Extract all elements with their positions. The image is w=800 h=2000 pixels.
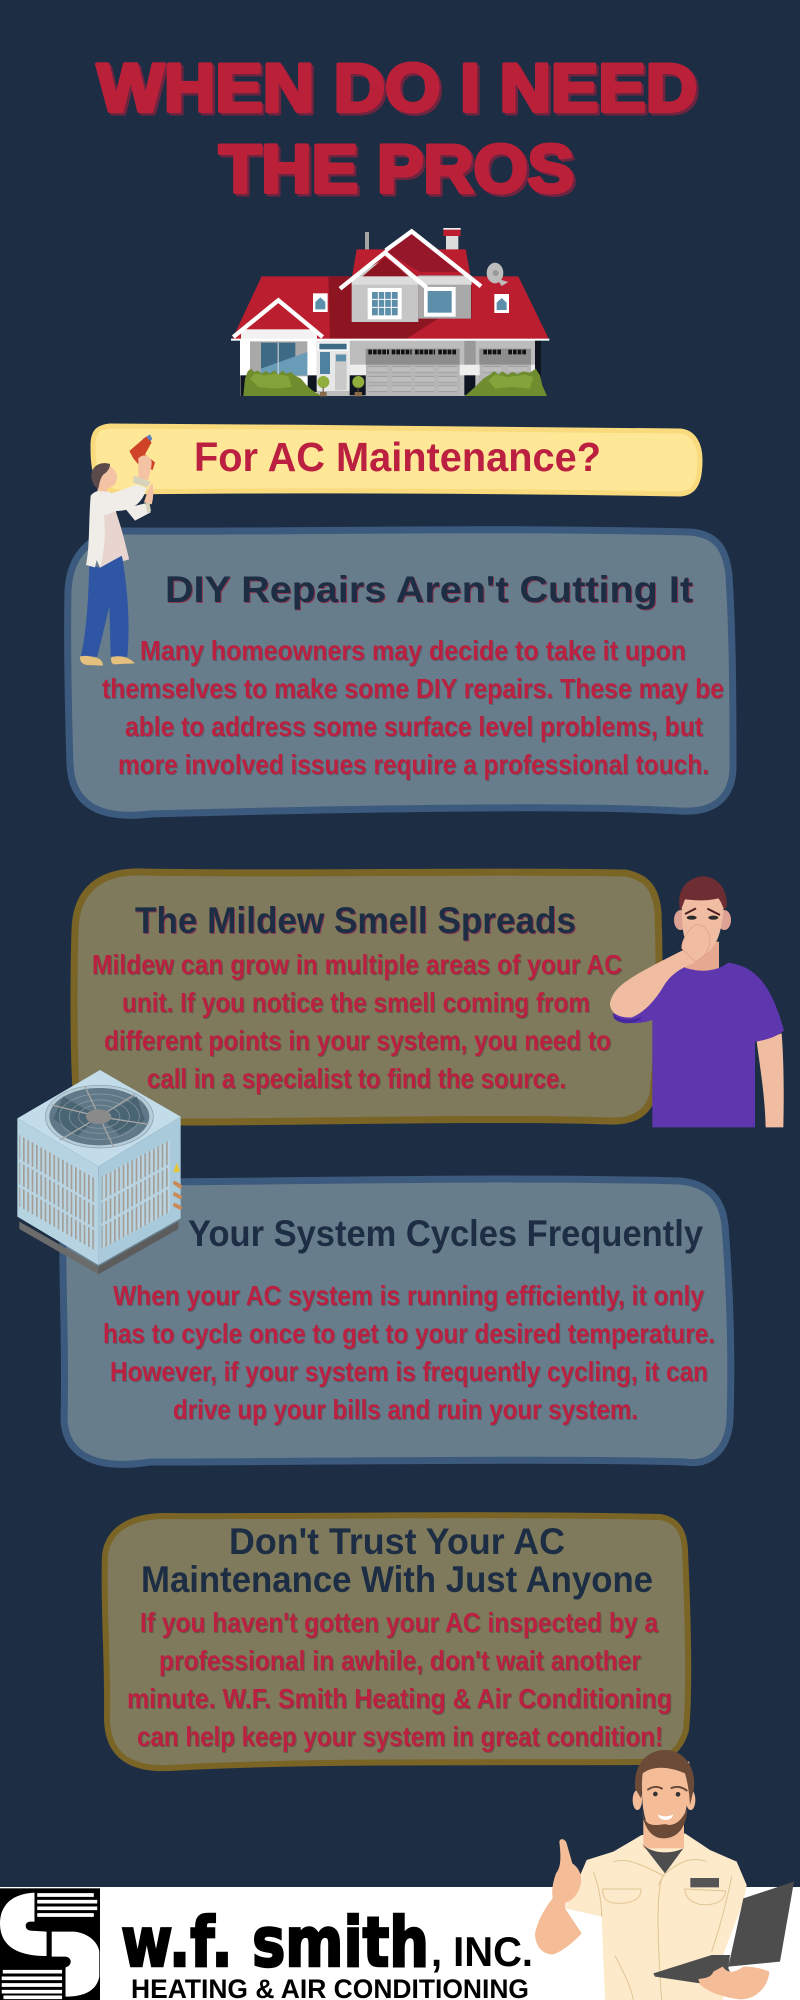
body text: system cycles: However, if your system is frequently cycling, it can <box>110 1356 708 1387</box>
body text: DIY repairs <box>102 635 724 780</box>
illustration: AC unit <box>17 1070 181 1274</box>
body text: system cycles: has to cycle once to get to your desired temperature. <box>103 1318 715 1349</box>
title: THE PROS <box>219 131 574 207</box>
body text: DIY repairs: Many homeowners may decide to take it upon <box>140 635 686 666</box>
body text: system cycles: drive up your bills and ruin your system. <box>173 1394 638 1425</box>
body text: trust your AC: professional in awhile, don't wait another <box>159 1645 641 1676</box>
illustration: technician with laptop <box>535 1750 794 2000</box>
body text: DIY repairs: able to address some surface level problems, but <box>125 711 703 742</box>
body text: mildew smell: Mildew can grow in multiple areas of your AC <box>92 949 622 980</box>
body text: system cycles: When your AC system is running efficiently, it only <box>113 1280 704 1311</box>
illustration: house <box>231 228 549 396</box>
title <box>97 50 700 210</box>
illustration: man with drill <box>80 434 155 666</box>
heading: system cycles: Your System Cycles Frequently <box>188 1213 703 1254</box>
title: WHEN DO I NEED <box>97 50 697 126</box>
panel: system cycles <box>63 1179 731 1464</box>
logo mark <box>0 1888 100 2000</box>
title: THE PROS <box>222 134 576 210</box>
body text: mildew smell: call in a specialist to find the source. <box>147 1063 566 1094</box>
banner: For AC Maintenance?: For AC Maintenance? <box>194 434 601 480</box>
title: WHEN DO I NEED <box>100 52 700 128</box>
heading: trust your AC: Maintenance With Just Anyone <box>141 1559 653 1600</box>
body text: mildew smell: unit. If you notice the smell coming from <box>122 987 590 1018</box>
panel: DIY repairs <box>68 530 733 815</box>
body text: trust your AC <box>127 1607 672 1752</box>
body text: DIY repairs: themselves to make some DIY repairs. These may be <box>102 673 724 704</box>
illustration: person covering nose <box>610 876 784 1127</box>
body text: mildew smell <box>92 949 622 1094</box>
heading: mildew smell: The Mildew Smell Spreads <box>135 900 576 941</box>
footer band <box>0 1887 800 2000</box>
body text: trust your AC: can help keep your system in great condition! <box>137 1721 663 1752</box>
heading: DIY repairs: DIY Repairs Aren't Cutting It <box>165 569 693 610</box>
banner: For AC Maintenance? <box>93 426 700 494</box>
heading: trust your AC <box>141 1521 653 1600</box>
logo wordmark: w.f. smith <box>121 1903 429 1983</box>
body text: system cycles <box>103 1280 715 1425</box>
panel: trust your AC <box>105 1515 688 1768</box>
body text: mildew smell: different points in your system, you need to <box>104 1025 611 1056</box>
logo wordmark: , INC. <box>431 1928 533 1975</box>
heading: trust your AC: Don't Trust Your AC <box>229 1521 565 1562</box>
body text: DIY repairs: more involved issues require a professional touch. <box>118 749 709 780</box>
panel: mildew smell <box>74 872 659 1122</box>
body text: trust your AC: If you haven't gotten your AC inspected by a <box>140 1607 658 1638</box>
body text: trust your AC: minute. W.F. Smith Heating & Air Conditioning <box>127 1683 672 1714</box>
